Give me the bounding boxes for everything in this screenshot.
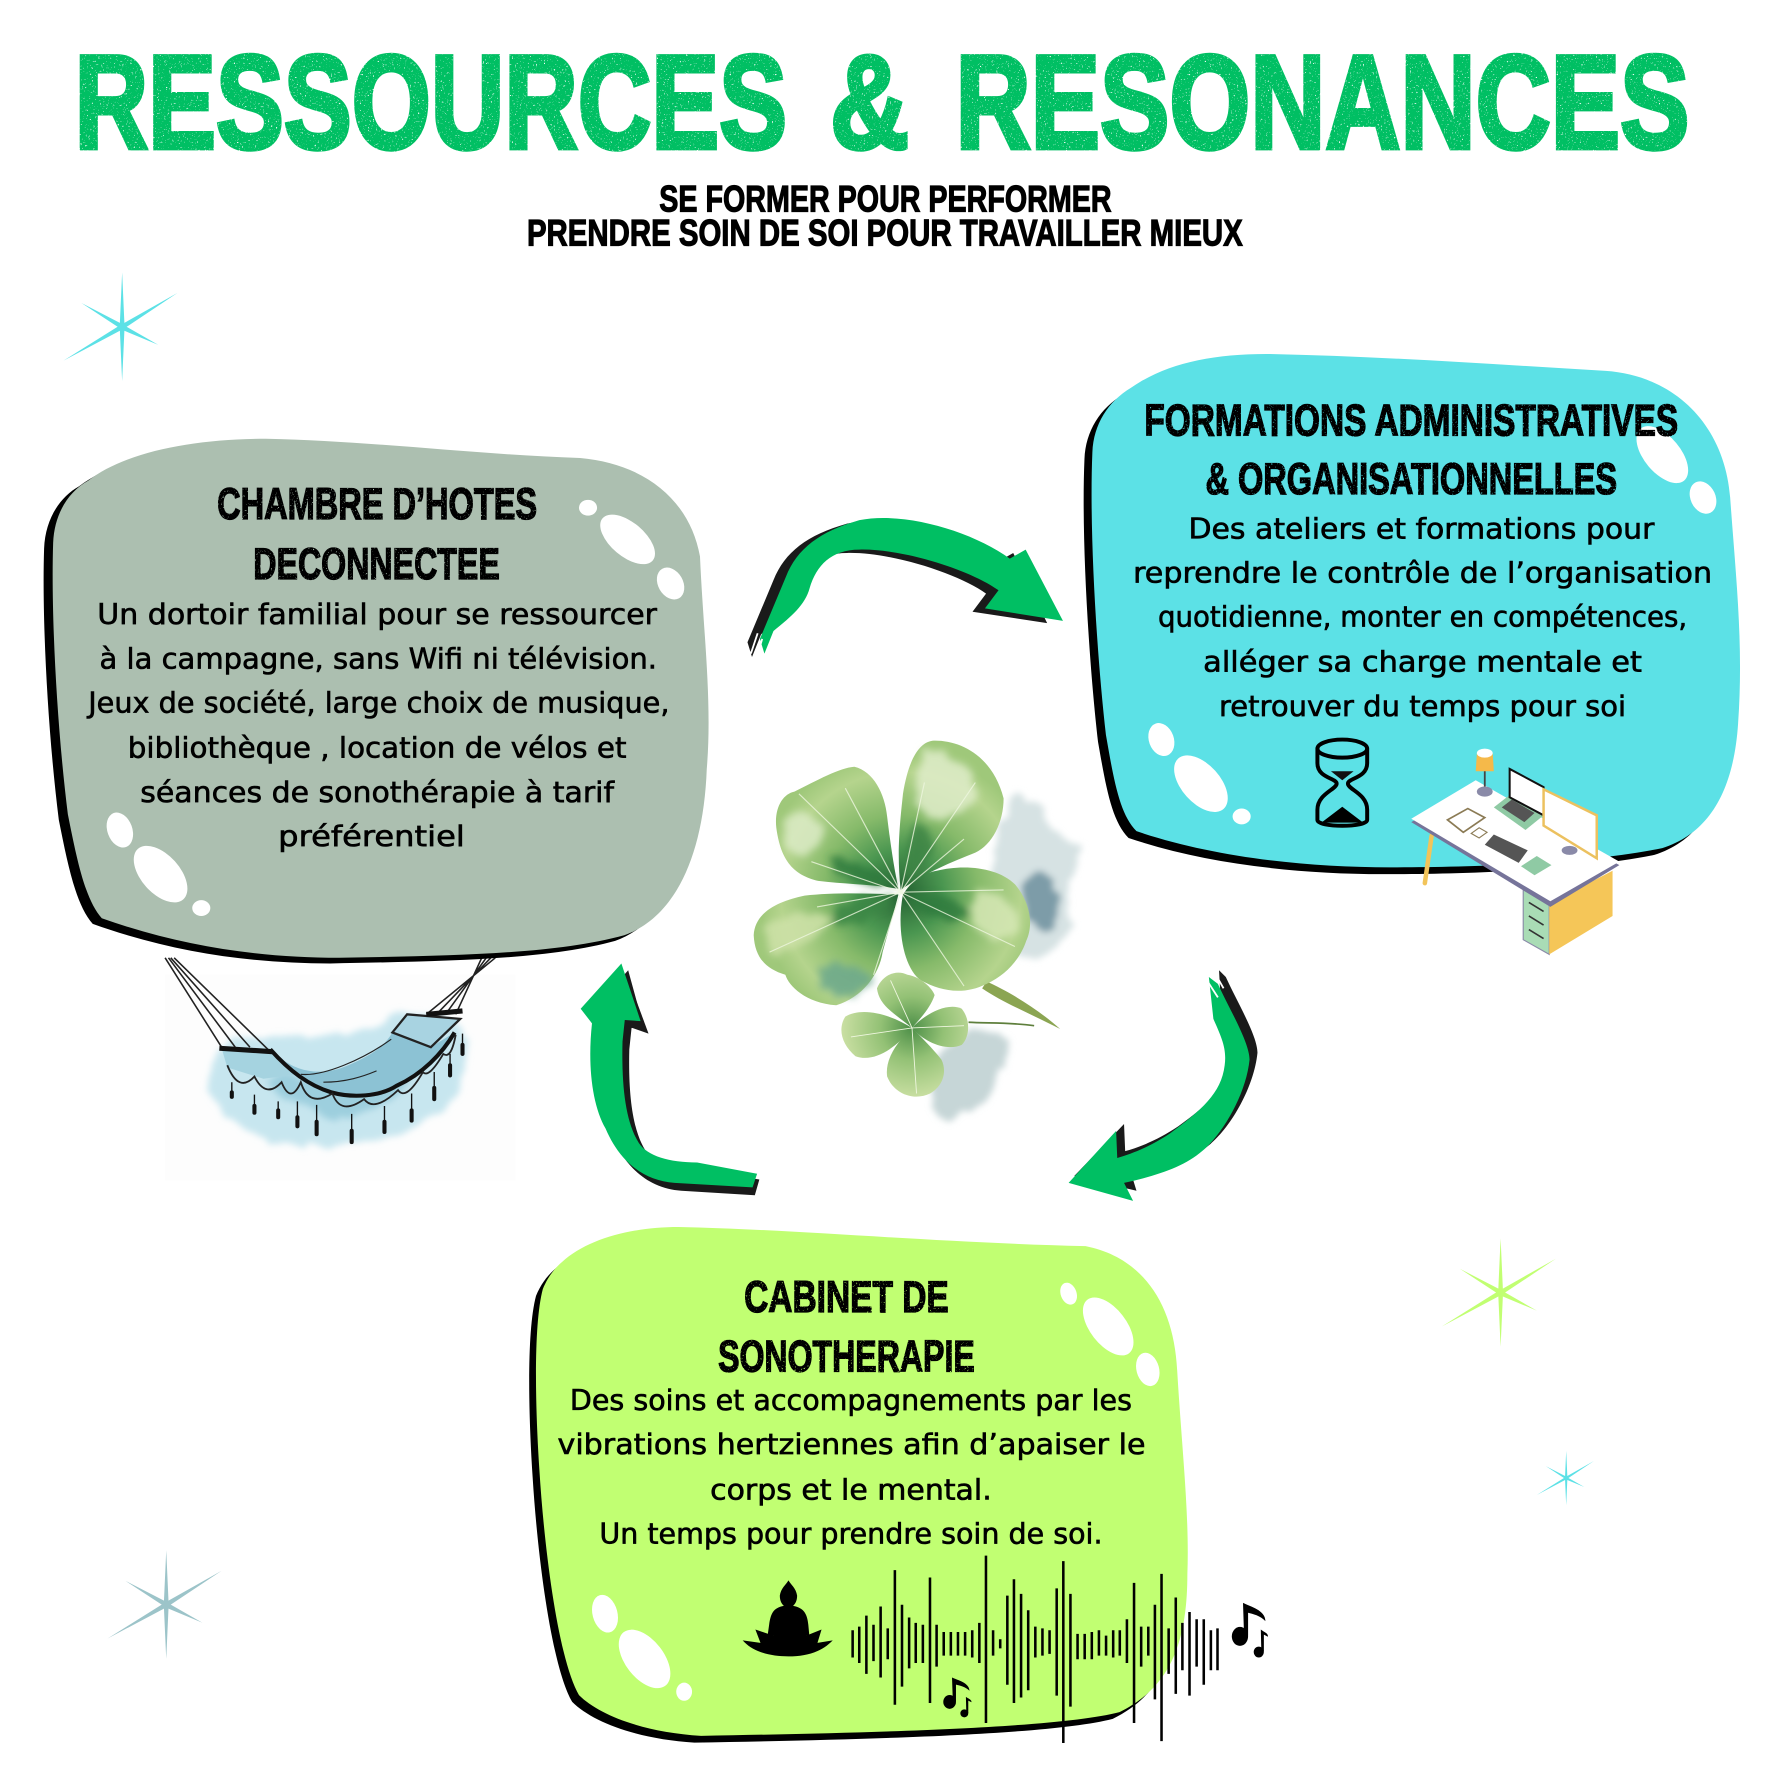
illustration: clover	[754, 741, 1077, 1120]
panel shape shadow	[529, 1234, 1181, 1743]
icon: music notes low	[943, 1677, 971, 1717]
heading	[217, 480, 537, 589]
body text: retrouver du temps pour soi	[1219, 690, 1626, 723]
arrow body	[760, 518, 1063, 654]
arrow body	[1069, 977, 1250, 1201]
stem	[982, 982, 1060, 1029]
four large leaves	[754, 741, 1030, 1005]
title	[75, 28, 1689, 177]
subtitle	[527, 177, 1243, 253]
icon: sparkle grey bottom left	[107, 1550, 222, 1659]
watercolor wash	[930, 793, 1077, 1120]
body text: quotidienne, monter en compétences,	[1158, 600, 1687, 633]
heading: DECONNECTEE	[253, 540, 500, 589]
body text: alléger sa charge mentale et	[1203, 646, 1642, 679]
illustration: hammock	[165, 958, 516, 1181]
body text: séances de sonothérapie à tarif	[140, 776, 615, 809]
arrow: formations to cabinet	[1069, 970, 1257, 1201]
body text: vibrations hertziennes afin d’apaiser le	[557, 1428, 1146, 1461]
subtitle: PRENDRE SOIN DE SOI POUR TRAVAILLER MIEUX	[527, 211, 1243, 253]
brush tail	[751, 633, 773, 658]
illustration: desk	[1411, 749, 1619, 954]
body text	[1133, 512, 1712, 723]
icon: small sparkle cyan right	[1537, 1451, 1594, 1505]
arrow shadow	[587, 970, 759, 1195]
tablet, keyboard and mouse pad	[1447, 809, 1485, 832]
leaf veins	[770, 783, 1015, 986]
highlights	[102, 500, 690, 916]
desk top	[1411, 784, 1619, 907]
leaf shading patches	[763, 751, 1018, 996]
sound waveform	[853, 1556, 1218, 1743]
panel shape shadow	[44, 444, 700, 963]
panel: formations	[1084, 354, 1740, 874]
heading	[1144, 396, 1678, 504]
hammock fabric	[282, 1032, 455, 1095]
body text: Un dortoir familial pour se ressourcer	[97, 598, 657, 631]
body text: Un temps pour prendre soin de soi.	[599, 1518, 1103, 1551]
subtitle: SE FORMER POUR PERFORMER	[659, 177, 1112, 219]
body text: reprendre le contrôle de l’organisation	[1133, 556, 1712, 589]
icon: hourglass	[1317, 740, 1367, 826]
arrow: chambre to formations	[747, 518, 1063, 658]
body text: corps et le mental.	[710, 1473, 992, 1506]
small clover	[841, 973, 968, 1097]
monitor	[1544, 789, 1597, 858]
laptop	[1494, 795, 1544, 830]
icon: sparkle lime right	[1442, 1238, 1556, 1347]
heading: SONOTHERAPIE	[718, 1333, 975, 1382]
panel shape shadow	[1084, 361, 1732, 874]
title: RESSOURCES	[75, 28, 787, 177]
heading: CHAMBRE D’HOTES	[217, 480, 537, 529]
lamp	[1484, 762, 1486, 789]
highlights	[588, 1280, 1163, 1701]
icon: music notes right	[1232, 1603, 1268, 1657]
arrow body	[581, 963, 757, 1187]
brush tail	[1208, 973, 1224, 997]
heading: CABINET DE	[744, 1273, 949, 1322]
heading	[718, 1273, 975, 1382]
body text: préférentiel	[278, 820, 465, 853]
arrow: cabinet to chambre	[581, 963, 759, 1195]
highlights	[1144, 417, 1721, 824]
body text: bibliothèque , location de vélos et	[128, 732, 626, 765]
panel: sonotherapie	[529, 1227, 1188, 1743]
arrow shadow	[747, 521, 1047, 657]
body text: Des soins et accompagnements par les	[570, 1384, 1132, 1417]
panel shape fill	[1092, 354, 1740, 867]
panel: chambre d'hotes	[44, 439, 709, 963]
drawer unit	[1523, 889, 1549, 954]
desk leg	[1425, 836, 1432, 883]
body text: Des ateliers et formations pour	[1188, 512, 1655, 545]
panel shape fill	[536, 1227, 1188, 1736]
body text	[86, 598, 669, 853]
heading: & ORGANISATIONNELLES	[1205, 455, 1617, 504]
body text: Jeux de société, large choix de musique,	[86, 686, 669, 719]
icon: sparkle top left	[63, 273, 178, 381]
body text: à la campagne, sans Wifi ni télévision.	[100, 642, 657, 675]
panel shape fill	[53, 439, 709, 958]
icon: meditating figure on lotus	[743, 1580, 833, 1656]
arrow shadow	[1074, 970, 1257, 1191]
body text	[557, 1384, 1146, 1551]
title: &	[830, 28, 909, 177]
